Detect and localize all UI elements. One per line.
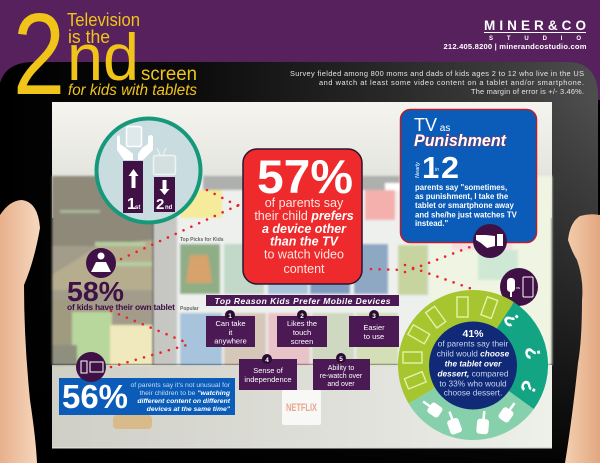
reason 2 <box>277 310 327 347</box>
panel: 56 percent <box>59 378 235 415</box>
1 in 2: 2 <box>441 150 459 185</box>
reason 5 <box>313 353 370 390</box>
reason 4 <box>239 354 297 390</box>
quote: instead." <box>415 219 448 228</box>
tablet screen <box>52 102 552 448</box>
nd: nd <box>67 20 139 94</box>
netflix card: NETFLIX <box>286 402 317 414</box>
donut text: the tablet over <box>445 358 502 368</box>
1 in 2 <box>415 150 459 185</box>
reason 3 <box>349 310 399 347</box>
left hand <box>0 200 40 463</box>
bar: second: nd <box>165 205 173 211</box>
reason 2: Likes the <box>287 319 317 328</box>
reason 3: to use <box>364 332 384 341</box>
contact: 212.405.8200 | minerandcostudio.com <box>444 42 587 51</box>
question marks: ? <box>516 377 542 398</box>
icon: tablet in hands <box>117 126 153 160</box>
label: top picks: Top Picks for Kids <box>180 237 224 243</box>
panel: 57 percent: than the TV <box>270 234 340 248</box>
panel: top reasons <box>206 295 399 390</box>
reason 4: 4 <box>265 357 269 364</box>
cookie <box>113 415 152 429</box>
netflix card <box>282 390 321 425</box>
question marks: ? <box>499 307 525 331</box>
quote: parents say "sometimes, <box>415 183 507 192</box>
donut text <box>437 328 510 398</box>
panel: 57 percent: of parents say <box>265 196 344 210</box>
panel: 57 percent: to watch video <box>264 248 344 262</box>
icon: kid with tablet <box>86 248 116 278</box>
reason 5: Ability to <box>328 365 354 372</box>
icon: popsicle vs tablet: vs <box>516 285 520 290</box>
panel: 56 percent: of parents say it's not unusual for <box>130 382 231 389</box>
heading bar: Top Reason Kids Prefer Mobile Devices <box>214 296 391 306</box>
reason 3: Easier <box>363 323 385 332</box>
panel: 57 percent: content <box>283 262 325 276</box>
donut text: 41% <box>462 328 484 340</box>
bar: second: 2 <box>156 196 164 213</box>
Television is the: Television <box>67 10 140 30</box>
minecraft scene <box>52 176 153 365</box>
subtitle: for kids with tablets <box>68 82 197 99</box>
panel: 57 percent: their child prefers <box>254 209 354 223</box>
punishment word: Punishment <box>414 132 507 150</box>
label: popular: Popular <box>180 306 199 312</box>
survey note: The margin of error is +/- 3.46%. <box>471 87 584 96</box>
icon: popsicle vs tablet <box>500 268 538 306</box>
heading: TV as <box>414 115 450 135</box>
panel: TV as punishment <box>400 110 536 242</box>
1 in 2: 1 <box>422 150 439 185</box>
question marks <box>499 307 546 398</box>
wordmark: MINER&CO <box>484 18 586 33</box>
header band <box>0 0 600 100</box>
is the line: is the <box>68 27 110 47</box>
studio: STUDIO <box>489 36 581 42</box>
quote <box>415 183 518 228</box>
quote: tablet or smartphone away <box>415 201 514 210</box>
circle: first and second screen <box>96 118 200 222</box>
panel: 56 percent: 56% <box>62 378 128 415</box>
donut text: child would choose <box>437 348 510 358</box>
reason 2: touch <box>293 328 311 337</box>
reason 1: anywhere <box>214 336 247 346</box>
1 in 2: Nearly <box>415 161 421 178</box>
screen: screen <box>141 64 197 85</box>
reason 1: Can take <box>215 319 246 328</box>
donut text: choose dessert. <box>444 388 502 398</box>
tablet outlines <box>403 297 498 389</box>
panel: 57 percent: a device other <box>262 222 347 236</box>
bar: first: st <box>135 205 140 211</box>
quote: as punishment, I take the <box>415 192 509 201</box>
icon: multiple devices <box>76 352 106 382</box>
right hand <box>565 214 600 463</box>
panel: 56 percent: different content on different <box>137 398 231 405</box>
panel: 56 percent: devices at the same time" <box>147 406 231 413</box>
question marks: ? <box>521 344 546 361</box>
bar: second <box>154 177 175 213</box>
dotted connectors <box>111 190 475 367</box>
bar: first <box>123 161 143 213</box>
stat: 58 percent: 58% <box>67 276 124 307</box>
quote: and she/he just watches TV <box>415 210 518 220</box>
icon: television <box>154 148 176 174</box>
survey note: Survey fielded among 800 moms and dads of kids ages 2 to 12 who live in the US <box>290 69 584 78</box>
reason 1: 1 <box>228 313 232 320</box>
donut text: dessert, compared <box>437 368 509 378</box>
donut text: of parents say their <box>438 338 509 348</box>
panel: 56 percent: their children to be "watching <box>140 390 231 397</box>
donut centre <box>429 322 517 410</box>
bar: first: 1 <box>127 196 136 213</box>
popsicles <box>420 397 519 435</box>
reason 2: 2 <box>300 313 304 320</box>
reason 5: and over <box>327 381 355 388</box>
reason 3: 3 <box>372 313 376 320</box>
video grid <box>153 176 552 365</box>
panel: 57 percent: 57% <box>257 150 353 203</box>
reason 1 <box>206 310 255 347</box>
1 in 2: in <box>435 167 439 173</box>
donut text: to 33% who would <box>439 378 507 388</box>
logo <box>444 18 587 51</box>
chart: tablet vs dessert donut <box>398 290 548 440</box>
reason 5: re-watch over <box>320 373 363 380</box>
survey note: and watch at least some video content on a tablet and/or smartphone. <box>319 78 584 87</box>
stat: 58 percent <box>67 248 175 312</box>
title <box>13 0 197 119</box>
icon: pointing hand <box>473 224 507 258</box>
reason 1: it <box>229 328 233 337</box>
reason 4: Sense of <box>253 366 284 375</box>
reason 2: screen <box>291 337 313 346</box>
survey note <box>290 69 584 96</box>
stat: 58 percent: of kids have their own tablet <box>67 302 175 312</box>
reason 4: independence <box>244 375 292 384</box>
reason 5: 5 <box>339 356 343 363</box>
panel: 57 percent <box>243 149 362 284</box>
